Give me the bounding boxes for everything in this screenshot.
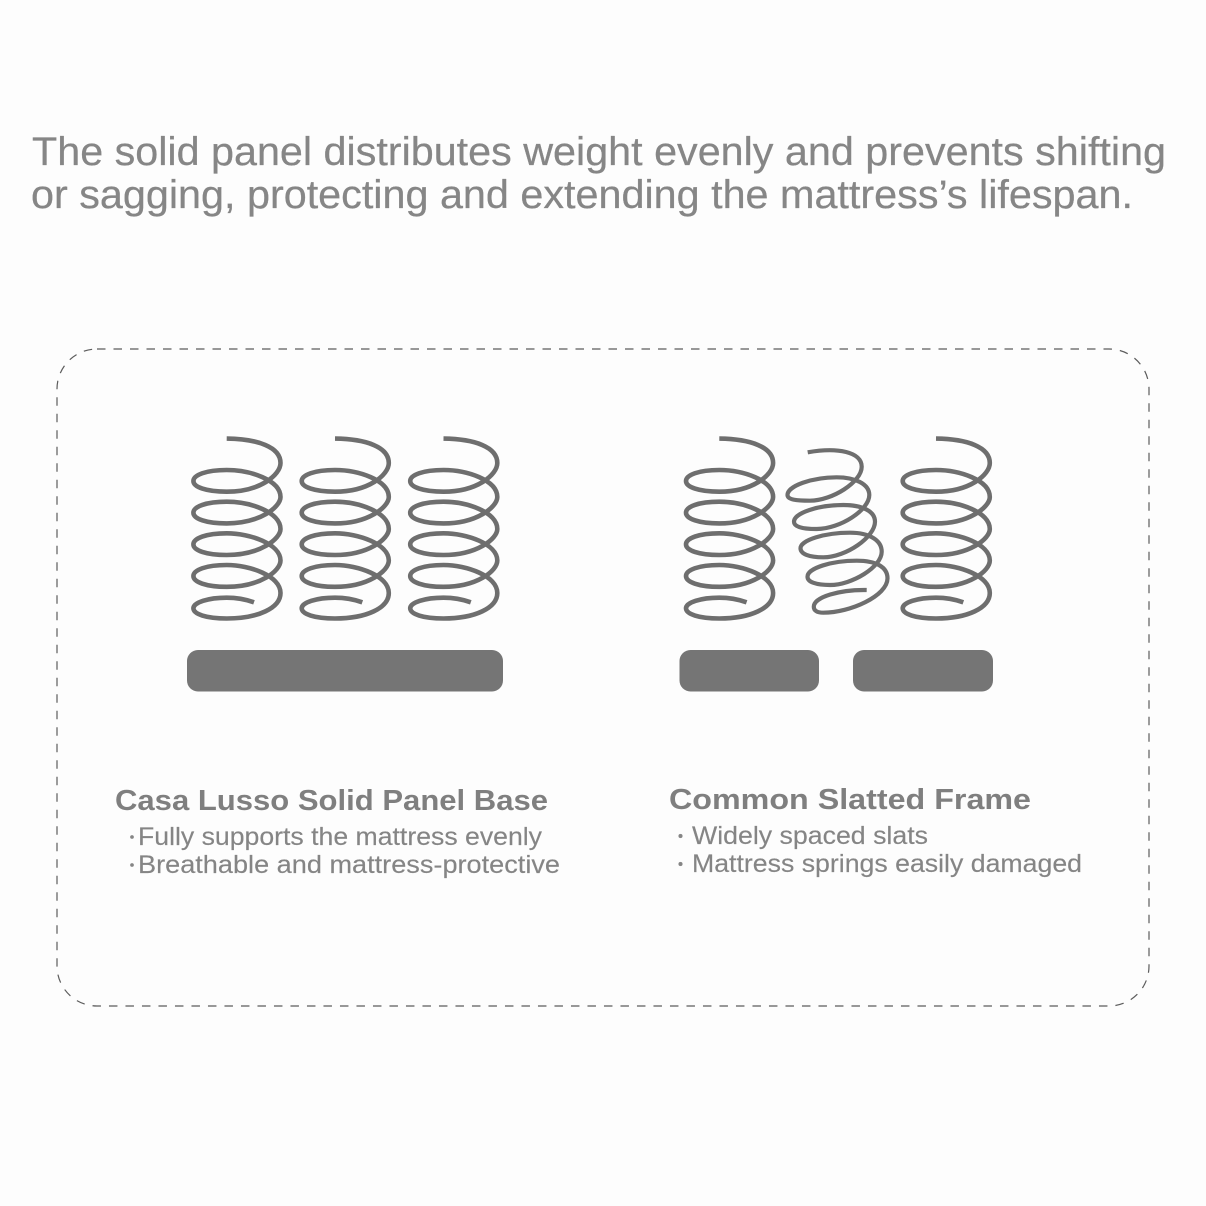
bullet list: Breathable and mattress-protective bbox=[138, 851, 560, 879]
icon: left slat bbox=[680, 650, 819, 692]
heading: Common Slatted Frame: Common Slatted Frame bbox=[669, 784, 1031, 816]
bullet list: Mattress springs easily damaged bbox=[692, 850, 1082, 878]
icon: right spring bbox=[903, 439, 990, 618]
diagram: slatted frame bbox=[680, 439, 993, 692]
icon: spring 2 bbox=[302, 439, 389, 618]
text block: Slatted frame features bbox=[669, 784, 1082, 878]
panel: comparison dashed frame bbox=[57, 349, 1149, 1006]
title: intro paragraph: or sagging, protecting and extending the mattress’s lifespan. bbox=[31, 173, 1133, 217]
diagram: solid panel base bbox=[187, 439, 503, 692]
icon: left spring bbox=[686, 439, 773, 618]
icon: spring 1 bbox=[193, 439, 280, 618]
title: intro paragraph bbox=[31, 130, 1166, 217]
bullet list bbox=[130, 823, 560, 879]
heading: Casa Lusso Solid Panel Base: Casa Lusso Solid Panel Base bbox=[115, 785, 548, 817]
bullet list bbox=[678, 822, 1082, 878]
icon: right slat bbox=[853, 650, 993, 692]
text block: Casa Lusso features bbox=[115, 785, 560, 879]
bullet list: Fully supports the mattress evenly bbox=[138, 823, 543, 851]
icon: spring 3 bbox=[410, 439, 497, 618]
bullet list: Widely spaced slats bbox=[692, 822, 928, 850]
title: intro paragraph: The solid panel distributes weight evenly and prevents shifting bbox=[32, 130, 1166, 174]
icon: deformed middle spring bbox=[788, 450, 888, 613]
icon: solid panel bar bbox=[187, 650, 503, 692]
